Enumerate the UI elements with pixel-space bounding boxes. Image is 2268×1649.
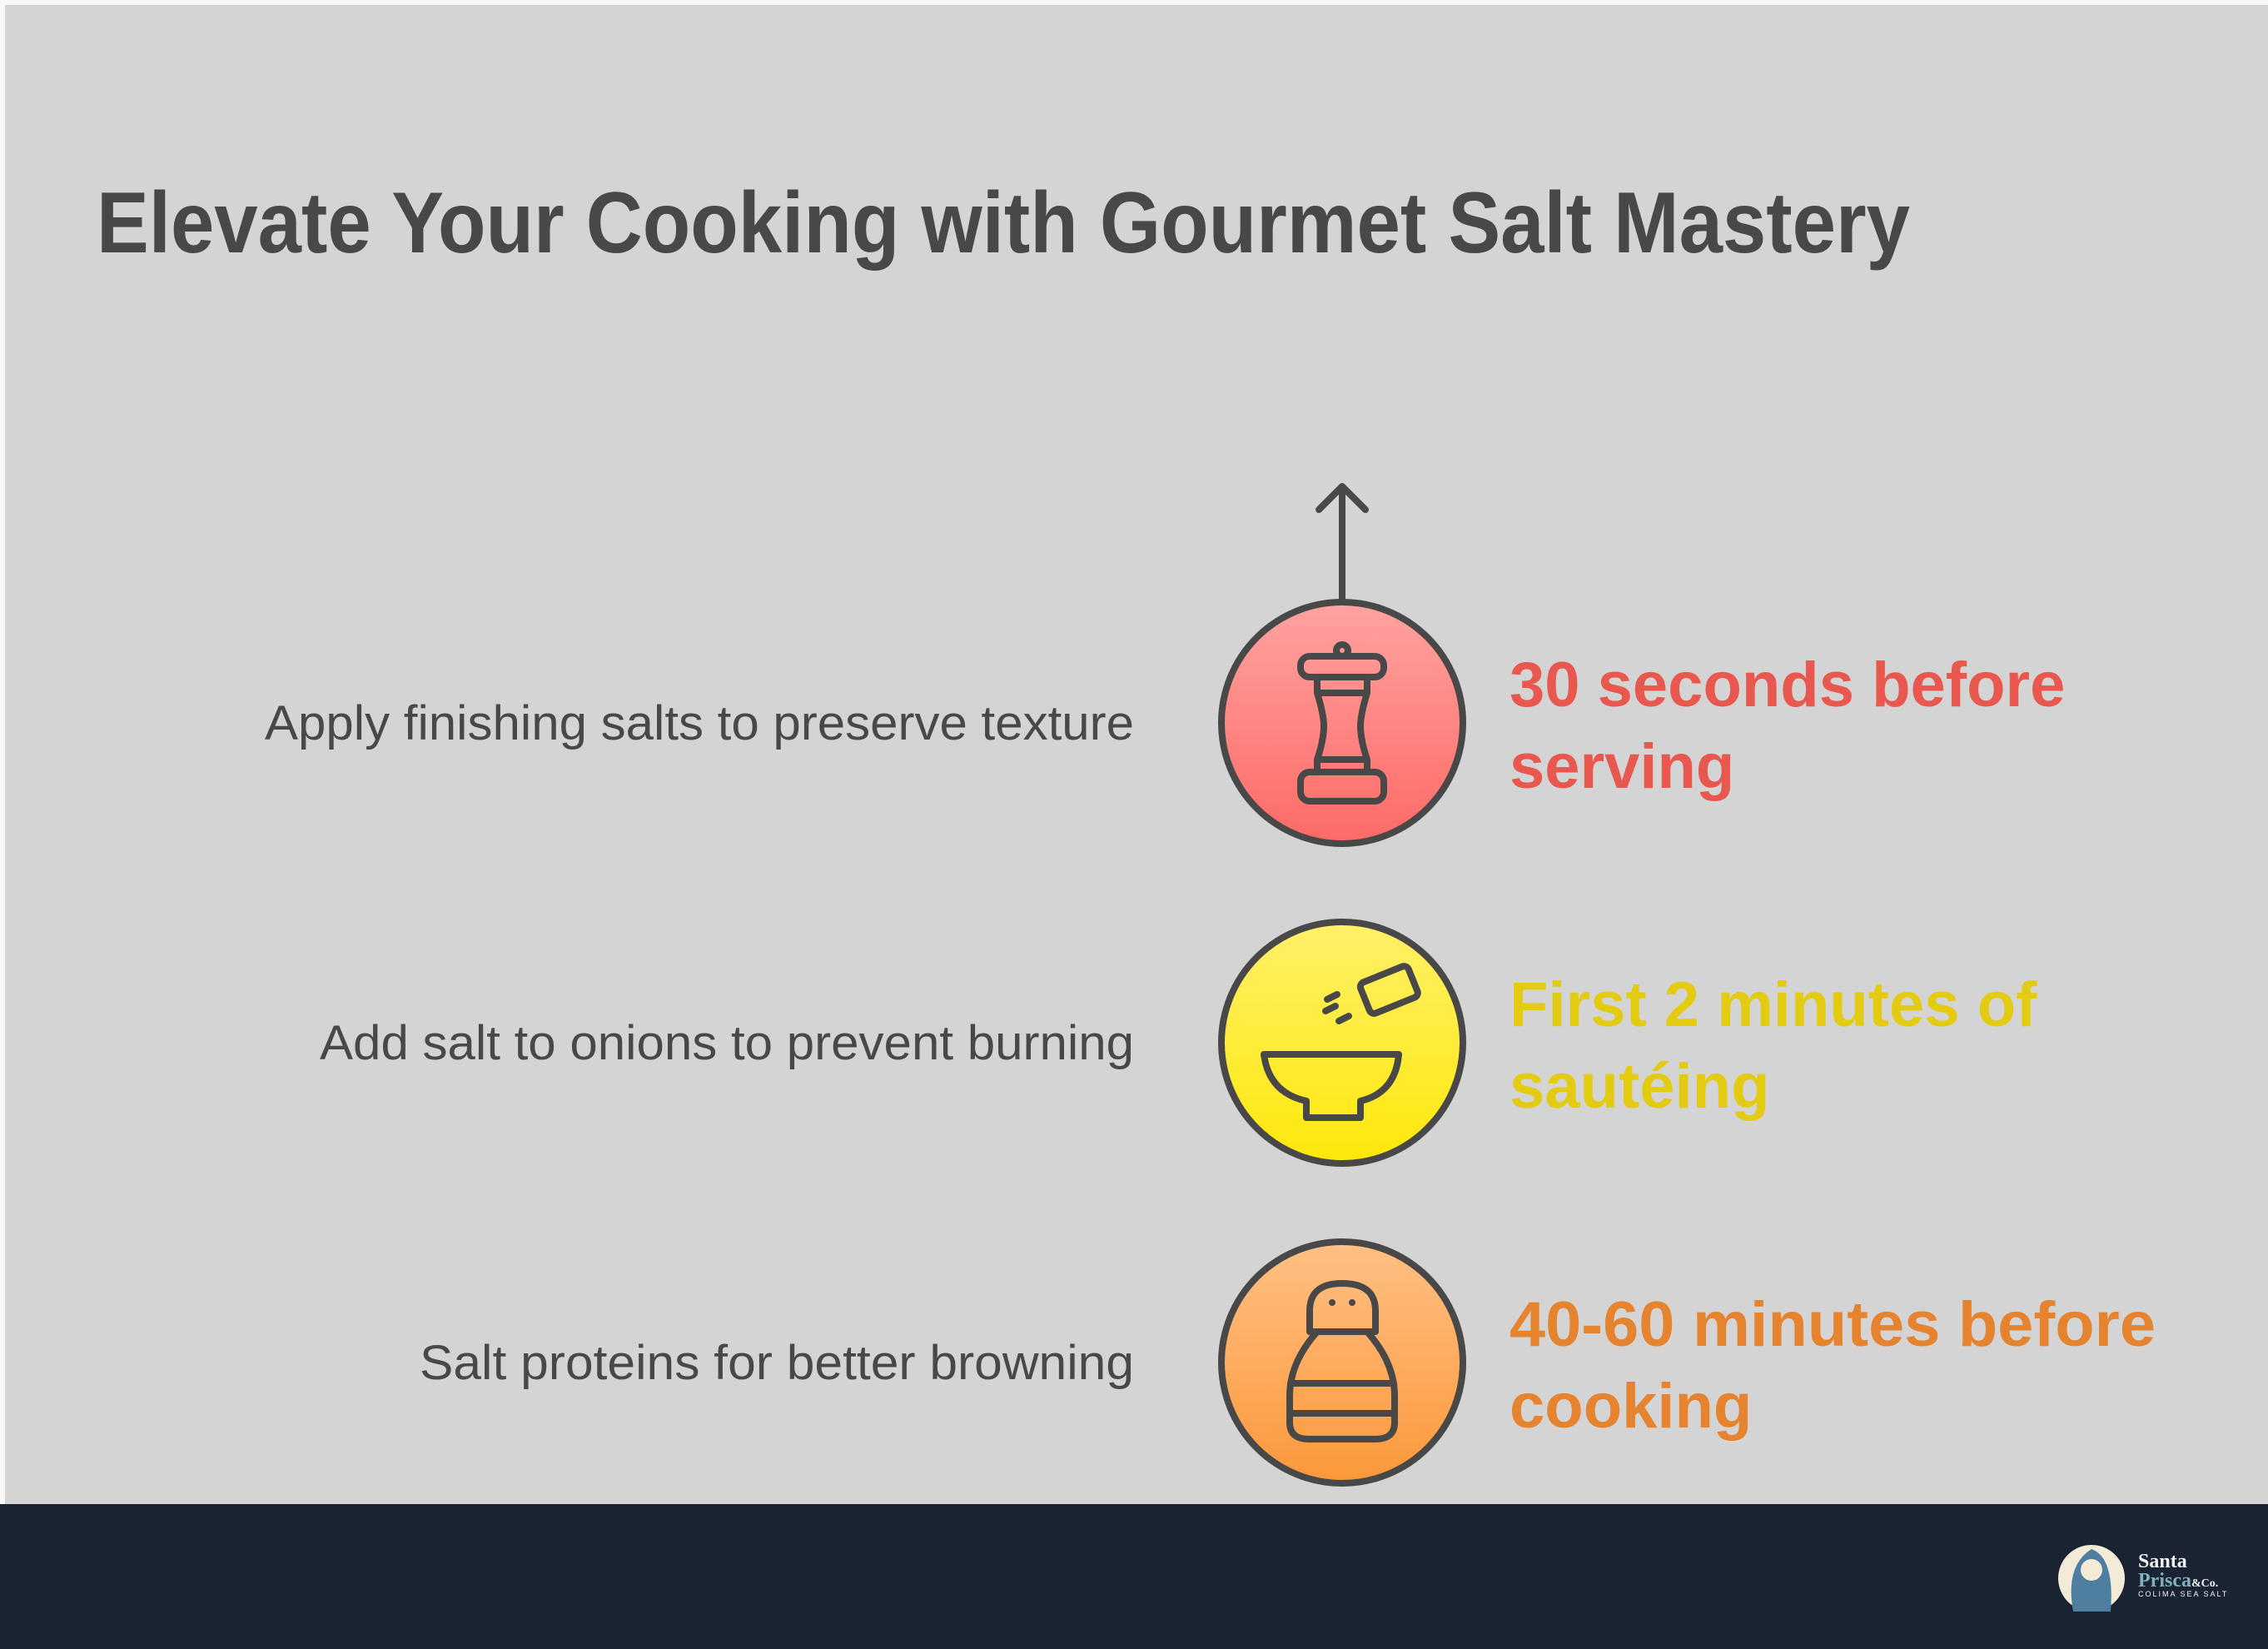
timing 3: 40-60 minutes before	[1510, 1289, 2156, 1360]
description 2: Add salt to onions to prevent burning	[320, 1016, 1134, 1070]
footer bar	[0, 1504, 2268, 1649]
description 3: Salt proteins for better browning	[420, 1336, 1134, 1390]
timing 1: 30 seconds before	[1510, 650, 2065, 720]
logo: Santa	[2138, 1551, 2187, 1572]
icon: bowl and salt	[1221, 922, 1463, 1163]
step 1: finishing salts	[265, 602, 2065, 844]
logo	[2058, 1545, 2228, 1612]
timing 3: cooking	[1510, 1371, 1752, 1442]
title: Elevate Your Cooking with Gourmet Salt Mastery	[97, 175, 1910, 272]
logo: Prisca&Co.	[2138, 1570, 2218, 1592]
step 3: proteins	[420, 1242, 2156, 1483]
arrow up	[1319, 486, 1365, 600]
icon: pepper mill circle	[1221, 602, 1463, 844]
step 2: onions	[320, 922, 2037, 1163]
description 1: Apply finishing salts to preserve texture	[265, 696, 1134, 750]
icon: salt shaker	[1221, 1242, 1463, 1483]
timing 2: sautéing	[1510, 1051, 1770, 1122]
timing 2: First 2 minutes of	[1510, 969, 2037, 1040]
timing 1: serving	[1510, 731, 1734, 802]
logo: COLIMA SEA SALT	[2138, 1590, 2228, 1598]
